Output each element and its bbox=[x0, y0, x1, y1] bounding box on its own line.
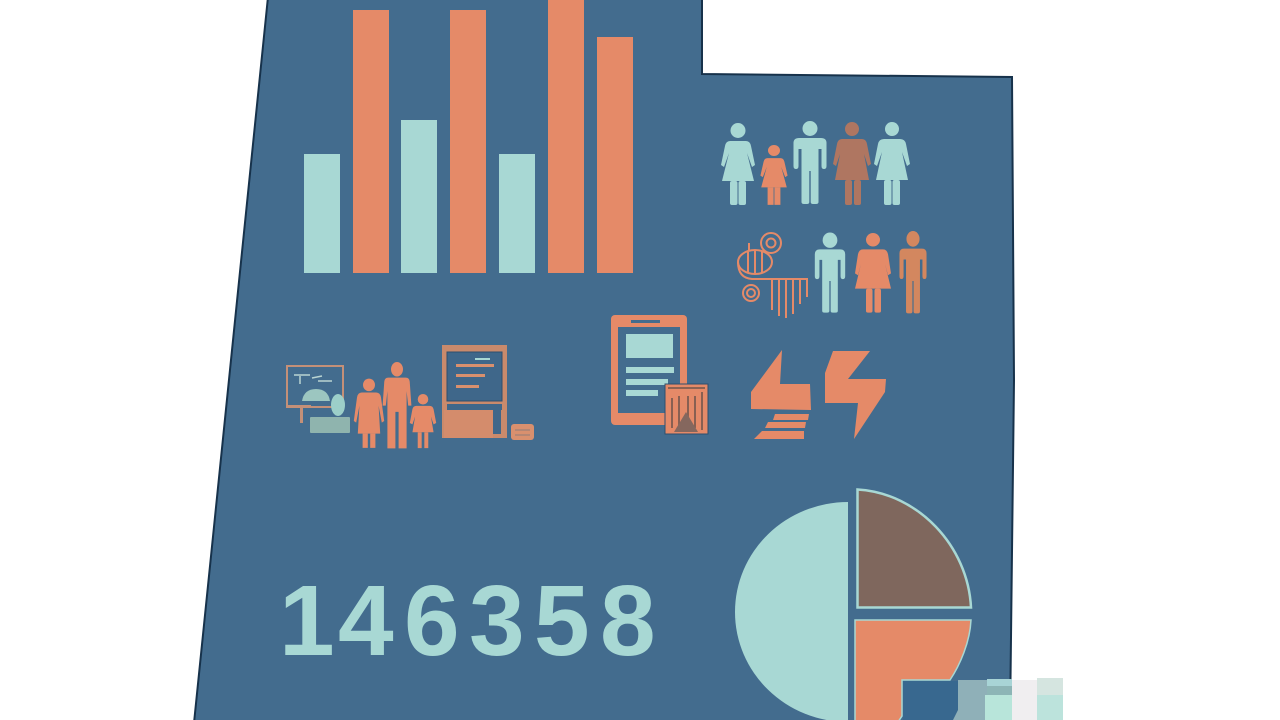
panel: blue map shape bbox=[194, 0, 1014, 720]
man orange-brown bbox=[899, 231, 927, 313]
icon: presentation board with viewer bbox=[287, 366, 350, 433]
icon: ornate square badge bbox=[665, 384, 708, 434]
notch patch bbox=[903, 681, 958, 720]
woman teal bbox=[721, 123, 755, 205]
icon: tablet with document bbox=[611, 315, 708, 434]
pie slice: teal half bbox=[735, 502, 848, 720]
icon: sketched DNA shape bbox=[738, 233, 807, 318]
man teal bbox=[794, 121, 826, 204]
icon: left lightning bolt with bars bbox=[751, 350, 811, 439]
icon: right lightning bolt bbox=[825, 351, 886, 439]
bar chart bbox=[304, 0, 633, 273]
icon: framed notice board bbox=[442, 345, 534, 440]
icon: family group row one bbox=[721, 121, 910, 205]
pie chart bbox=[735, 490, 971, 720]
blocky artefact patch bbox=[953, 678, 1063, 720]
pie slice: orange quarter bbox=[855, 620, 971, 720]
icon: people row two bbox=[815, 231, 927, 313]
child orange bbox=[760, 145, 788, 205]
woman brown bbox=[833, 122, 871, 205]
icon: family of three bbox=[354, 362, 436, 448]
woman orange bbox=[855, 233, 891, 313]
woman teal bbox=[874, 122, 910, 205]
big number: 146358 bbox=[279, 565, 656, 677]
pie slice: brown quarter bbox=[858, 490, 971, 608]
man teal bbox=[815, 233, 845, 313]
